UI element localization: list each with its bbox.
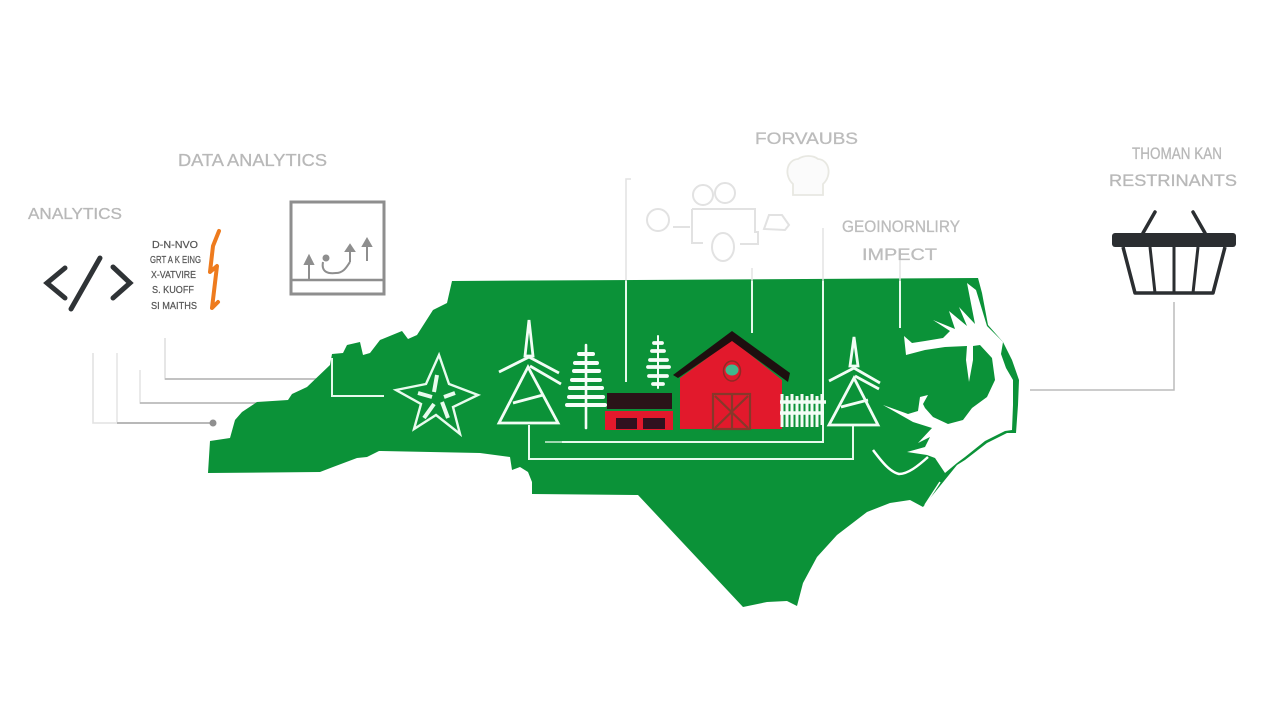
label: data analytics: DATA ANALYTICS [178,150,327,170]
connector: basket to map [1030,302,1174,390]
text block: small data list: SI MAITHS [151,301,197,312]
icon: chef hat [787,156,829,195]
icon: star [396,355,478,434]
label: forvaubs: FORVAUBS [755,129,858,148]
text block: small data list: GRT A K EING [150,255,201,266]
icon: food network diagram [647,183,789,261]
label: local restaurants [1109,145,1237,190]
icon: pine tree [567,345,605,428]
icon: small red shed [605,393,673,430]
icon: pylon tree left [499,320,561,423]
icon: shopping basket [1112,212,1236,293]
sounds and coastal water cutouts [873,283,1013,505]
label: local restaurants: RESTRINANTS [1109,172,1237,190]
label: geographic impact [842,218,960,264]
text block: small data list: D-N-NVO [152,240,198,251]
label: geographic impact: IMPECT [862,246,937,264]
icon: small pine tree [648,336,669,388]
icon: chart box with figures [291,202,384,294]
icon: red barn [673,331,790,429]
text block: small data list: S. KUOFF [152,285,194,296]
connector lines over the map [332,281,900,459]
icon: orange zigzag [210,231,219,308]
icon: white fence [780,394,826,427]
label: analytics: ANALYTICS [28,206,122,223]
connector lines: left gray leaders [93,338,320,426]
icon: code brackets [47,258,130,309]
map: North Carolina state shape [208,278,1019,607]
text block: small data list [150,240,201,312]
label: geographic impact: GEOINORNLIRY [842,218,960,236]
icon: pylon tree right [829,337,880,425]
label: local restaurants: THOMAN KAN [1132,145,1222,163]
connector lines above the map [626,179,900,281]
text block: small data list: X-VATVIRE [151,270,196,281]
